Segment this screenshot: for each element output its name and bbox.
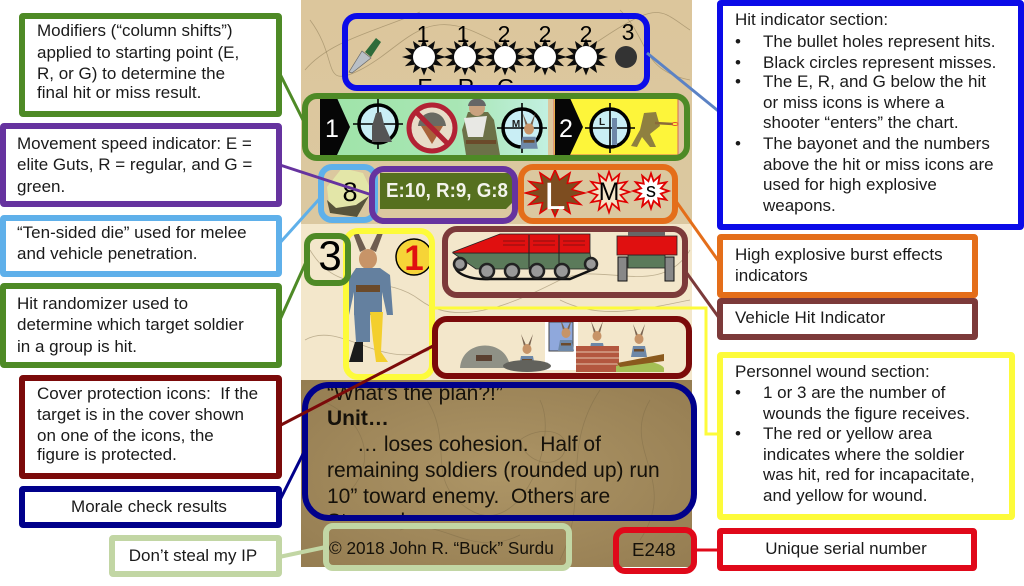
icon: M scope (497, 103, 547, 153)
highlight: bursts (521, 167, 675, 221)
E R G entry letters: R (458, 74, 474, 100)
numbers above hit icons: 2 (580, 21, 592, 47)
callout: personnel wound (720, 355, 1012, 517)
callout: burst effects: High explosive burst effects (735, 245, 943, 264)
callout: cover (22, 378, 279, 476)
callout: hit indicator section: The bullet holes represent hits. (763, 32, 995, 51)
wound number badge: 1 (404, 239, 424, 278)
callout: cover: on one of the icons, the (37, 426, 214, 445)
bullet holes (402, 39, 637, 75)
callout: personnel wound: The red or yellow area (763, 424, 933, 443)
movement speed tag (380, 173, 512, 209)
vehicle side view (453, 234, 597, 279)
icon: L scope (585, 103, 635, 153)
callout: personnel wound: was hit, red for incapacitate, (762, 465, 975, 484)
icon: no leader sign (409, 105, 455, 151)
icon: scope silhouette (353, 99, 403, 149)
callout: die: “Ten-sided die” used for melee (17, 223, 247, 242)
numbers above hit icons: 2 (498, 21, 510, 47)
callout: hit indicator section: Hit indicator section: (735, 10, 888, 29)
callout: movement speed: elite Guts, R = regular, and G = (17, 155, 252, 174)
callout: randomizer: Hit randomizer used to (17, 294, 188, 313)
callout: movement speed (3, 126, 279, 204)
copyright: © 2018 John R. “Buck” Surdu (329, 538, 554, 558)
callout: personnel wound: • (735, 424, 741, 443)
callout: modifiers: R, or G) to determine the (37, 64, 225, 83)
highlight: morale (305, 385, 694, 518)
numbers above hit icons: 2 (539, 21, 551, 47)
vehicle front view (617, 232, 677, 281)
callout: randomizer: in a group is hit. (17, 337, 137, 356)
callout: hit indicator section: • (735, 53, 741, 72)
callout: modifiers (22, 16, 279, 114)
callout: die: and vehicle penetration. (17, 244, 198, 263)
callout: hit indicator section: • (735, 72, 741, 91)
callout: modifiers: applied to starting point (E, (37, 43, 239, 62)
E R G entry letters: E (417, 74, 433, 100)
yellow modifier panel (554, 98, 678, 155)
card background (301, 0, 692, 567)
icon: bunker (460, 346, 510, 368)
callout: cover: target is in the cover shown (37, 405, 244, 424)
soldier figure (348, 232, 393, 362)
morale text (328, 388, 658, 515)
callout: hit indicator section: or miss icons is where a (763, 93, 945, 112)
callout: hit indicator section: used for high explosive (763, 175, 937, 194)
S burst: s (646, 180, 656, 202)
highlight: personnel (346, 231, 432, 377)
icon: log (616, 324, 664, 372)
callout: burst effects (720, 237, 975, 295)
ten-sided die (327, 168, 372, 217)
high explosive bursts (525, 170, 669, 218)
numbers above hit icons: 1 (457, 21, 469, 47)
callout: personnel wound: • (735, 383, 741, 402)
callout: personnel wound: Personnel wound section: (735, 362, 930, 381)
morale text: “What’s the plan?!” (327, 382, 503, 405)
callout: serial: Unique serial number (765, 539, 927, 558)
icon: L scope: L (599, 117, 605, 128)
cover icons (460, 318, 664, 372)
callout: randomizer: determine which target soldier (17, 315, 244, 334)
icon: window (545, 318, 578, 370)
callout: hit indicator section: The bayonet and the numbers (763, 134, 990, 153)
hit randomizer number: 3 (318, 232, 342, 279)
highlight: vehicle (445, 229, 685, 295)
M burst (589, 172, 629, 212)
callout: vehicle hit: Vehicle Hit Indicator (735, 308, 886, 327)
highlight: hit indicator (345, 16, 647, 88)
callout: vehicle hit (720, 301, 975, 337)
highlight: movement (372, 169, 515, 221)
serial number: E248 (632, 539, 676, 560)
L burst (525, 170, 585, 218)
callout: morale (22, 489, 279, 525)
morale text: Stunned. (327, 510, 411, 533)
highlight: modifiers (305, 96, 687, 158)
highlight: copyright (326, 526, 569, 568)
callout: burst effects: indicators (735, 266, 808, 285)
callout: hit indicator section: Black circles represent misses. (763, 53, 996, 72)
arrow 1 (320, 98, 350, 155)
hit indicator artwork (348, 24, 637, 85)
icon: brick wall (576, 321, 619, 372)
ten-sided die: 8 (342, 177, 358, 207)
callout: die (3, 218, 279, 274)
arrow 1: 1 (325, 115, 339, 143)
callout: hit indicator section: weapons. (762, 196, 836, 215)
callout: personnel wound: wounds the figure receives. (762, 404, 970, 423)
morale text: … loses cohesion. Half of (357, 433, 601, 456)
callout: personnel wound: indicates where the soldier (763, 445, 965, 464)
callout: personnel wound: 1 or 3 are the number of (763, 383, 946, 402)
E R G entry letters: G (497, 74, 515, 100)
arrow 2 (555, 98, 583, 155)
icon: M scope: M (512, 119, 520, 130)
numbers above hit icons (417, 19, 634, 47)
morale text: remaining soldiers (rounded up) run (327, 459, 660, 482)
green modifier panel (320, 98, 548, 155)
callout: randomizer (3, 286, 279, 365)
callout: IP: Don’t steal my IP (129, 546, 257, 565)
highlight: randomizer (307, 236, 348, 283)
wound number badge (396, 239, 432, 278)
callout: hit indicator section: The E, R, and G below the hit (763, 72, 986, 91)
icon: bayonet (349, 38, 381, 73)
callout: movement speed: green. (17, 177, 65, 196)
callout: hit indicator section: shooter “enters” the chart. (763, 113, 959, 132)
column shift row (320, 98, 678, 155)
highlight: serial (616, 530, 694, 571)
morale text: Unit… (327, 407, 389, 430)
numbers above hit icons: 1 (417, 21, 429, 47)
callout: IP (112, 538, 279, 574)
S burst (633, 173, 669, 209)
movement speed tag: E:10, R:9, G:8 (386, 180, 508, 202)
icon: wounded soldier (462, 98, 500, 155)
M burst: M (599, 178, 619, 206)
callout: personnel wound: and yellow for wound. (763, 486, 927, 505)
highlight: cover (435, 319, 689, 376)
L burst: L (544, 176, 566, 218)
callout: modifiers: Modifiers (“column shifts”) (37, 21, 233, 40)
callout: morale: Morale check results (71, 497, 227, 516)
callout: hit indicator section: • (735, 134, 741, 153)
icon: flamethrower soldier (631, 112, 678, 147)
callout: serial (720, 531, 974, 568)
E R G entry letters (419, 79, 513, 85)
icon: foxhole (503, 334, 551, 372)
highlight: die (321, 167, 375, 220)
callout: cover: figure is protected. (37, 445, 177, 464)
morale text: 10” toward enemy. Others are (327, 485, 610, 508)
connector lines (277, 53, 722, 557)
callout: movement speed: Movement speed indicator: E = (17, 134, 252, 153)
callout: hit indicator section: above the hit or miss icons are (763, 155, 994, 174)
numbers above hit icons: 3 (622, 19, 634, 45)
callout: hit indicator section: • (735, 32, 741, 51)
arrow 2: 2 (559, 115, 573, 143)
callout: hit indicator section (720, 3, 1021, 227)
callout: cover: Cover protection icons: If the (37, 384, 258, 403)
callout: modifiers: final hit or miss result. (37, 83, 201, 102)
